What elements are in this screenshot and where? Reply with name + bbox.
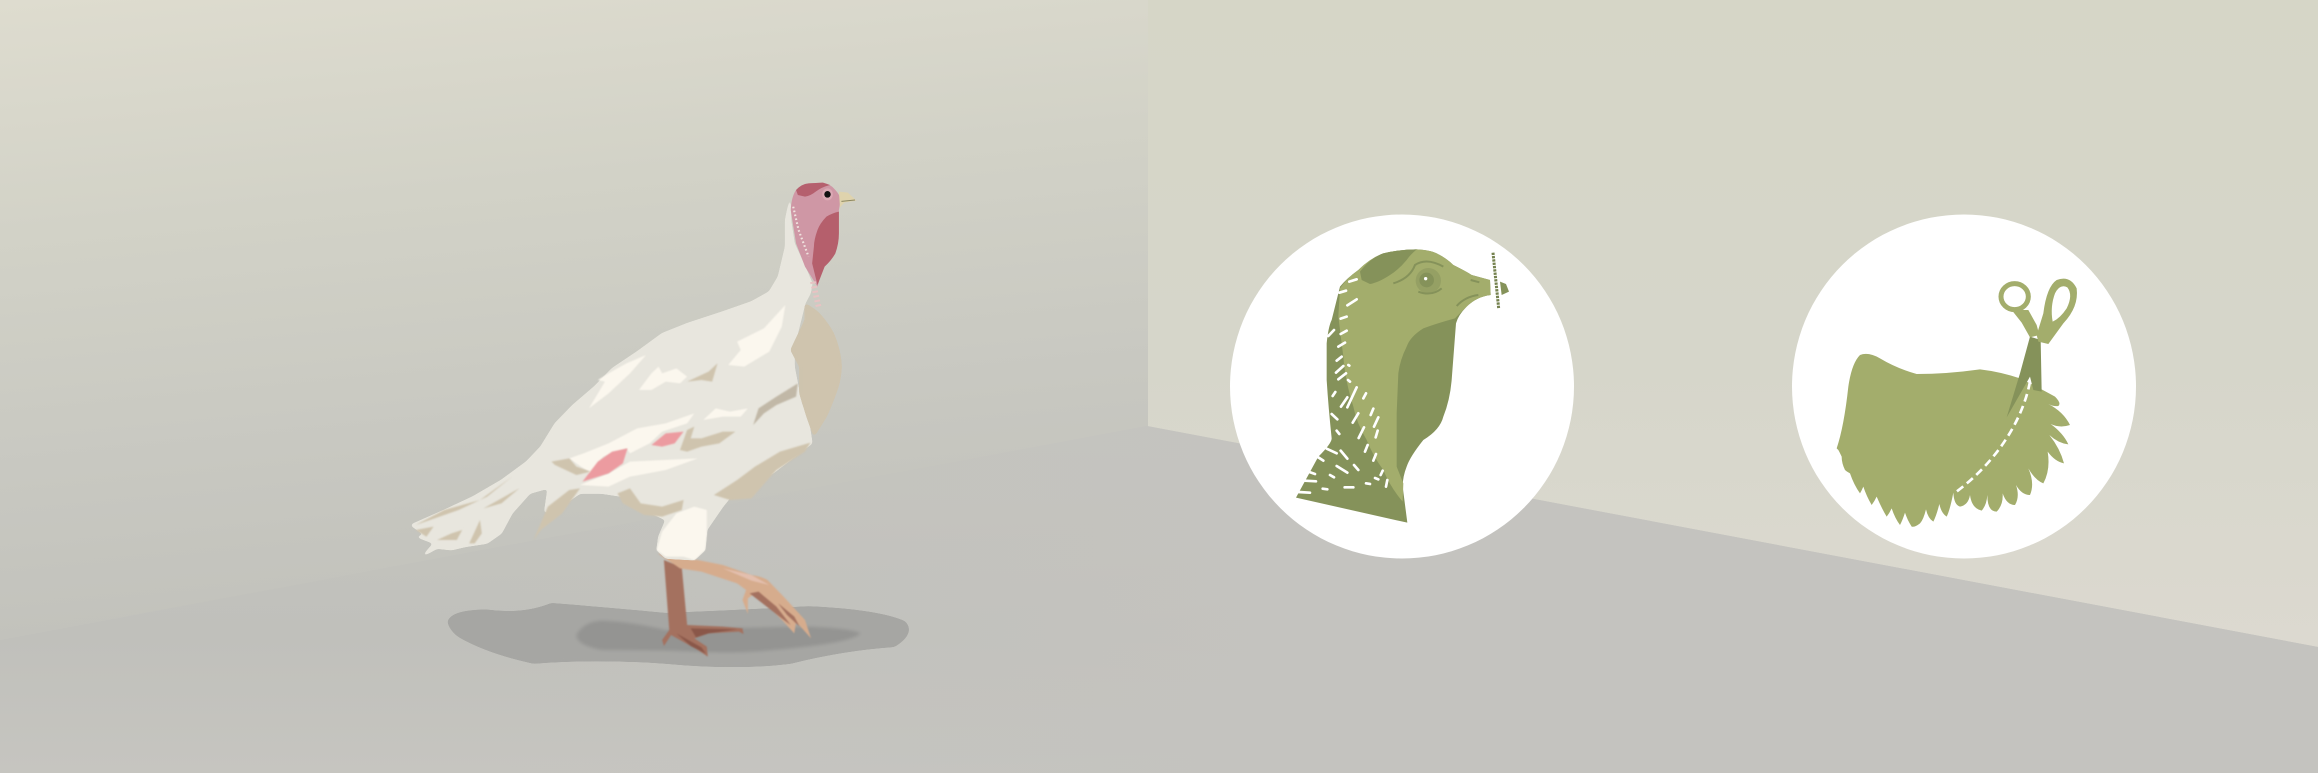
- background: floor: [0, 426, 2318, 773]
- turkey body plumage: [410, 193, 812, 560]
- turkey head: [791, 183, 856, 307]
- background: right wall: [1148, 0, 2318, 773]
- circle: wing clipping icon: [1792, 214, 2136, 558]
- wing strap: [753, 383, 798, 425]
- ground shadow: [448, 603, 909, 667]
- background: left wall: [0, 0, 1150, 773]
- circle: beak trimming icon: [1230, 214, 1574, 558]
- green wing and scissors: [1837, 279, 2077, 527]
- plumage highlights: [569, 305, 785, 560]
- dashed cut line: [1953, 382, 2030, 494]
- tan feather markings: [416, 363, 810, 543]
- white disc: [1792, 214, 2136, 558]
- pink skin patches: [582, 432, 684, 482]
- scissors: [2001, 279, 2077, 417]
- turkey legs: [658, 553, 811, 657]
- turkey with shadow: [410, 183, 909, 667]
- white disc: [1230, 214, 1574, 558]
- wing: [1837, 354, 2070, 527]
- turkey breast: [791, 303, 841, 437]
- green turkey head: [1296, 249, 1509, 523]
